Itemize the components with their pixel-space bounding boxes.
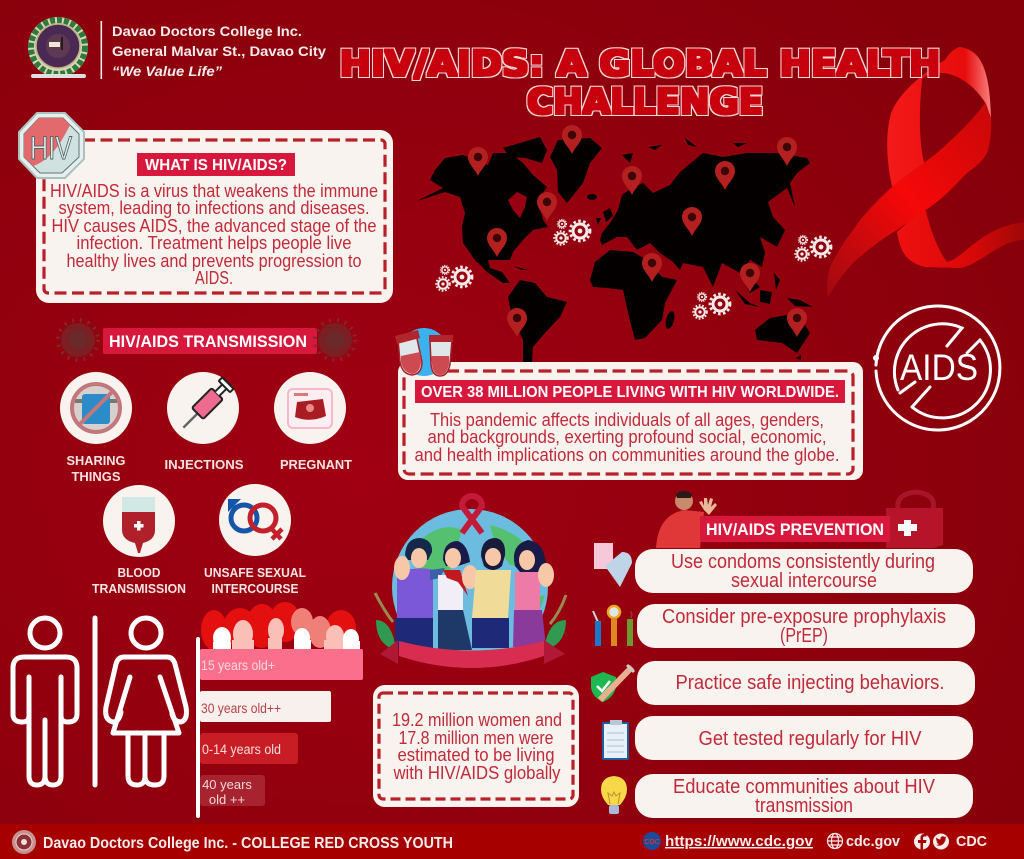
title xyxy=(340,44,940,122)
body text: HIV causes AIDS, the advanced stage of the xyxy=(52,216,376,236)
step: condoms xyxy=(635,549,973,593)
illustration: people and globe xyxy=(375,496,566,668)
heading xyxy=(415,380,845,403)
bar: 15 years old+: 15 years old+ xyxy=(201,658,275,673)
step: educate: Educate communities about HIV xyxy=(673,776,936,798)
continents xyxy=(417,137,813,362)
icon: condom packets xyxy=(594,543,632,587)
panel: what is HIV/AIDS xyxy=(36,130,393,303)
body text: and health implications on communities around the globe. xyxy=(414,445,840,465)
bar: 0-14 years old: 0-14 years old xyxy=(202,742,281,757)
item: sharing things: THINGS xyxy=(72,469,121,484)
college address: General Malvar St., Davao City xyxy=(112,43,326,59)
footer organisation name: Davao Doctors College Inc. - COLLEGE RED CROSS YOUTH xyxy=(43,835,453,852)
body text: 17.8 million men were xyxy=(398,728,554,748)
step: PrEP: Consider pre-exposure prophylaxis xyxy=(662,606,946,628)
item: sharing things xyxy=(60,372,132,484)
icon: woman xyxy=(106,618,186,785)
icon: CDC seal xyxy=(643,832,661,850)
icon: waving person xyxy=(656,491,717,548)
heading xyxy=(137,153,295,176)
heading: HIV/AIDS TRANSMISSION xyxy=(109,332,307,351)
person 4 xyxy=(513,540,554,647)
heading: OVER 38 MILLION PEOPLE LIVING WITH HIV WORLDWIDE. xyxy=(421,384,839,401)
site name: cdc.gov xyxy=(846,834,900,850)
body text xyxy=(414,410,840,465)
item: blood transmission: TRANSMISSION xyxy=(92,581,186,596)
body text: healthy lives and prevents progression to xyxy=(66,251,362,271)
source name: CDC xyxy=(956,834,988,850)
item: injections xyxy=(164,372,244,472)
item: unsafe sexual intercourse xyxy=(204,484,306,596)
panel: 38 million xyxy=(398,362,863,480)
section: transmission xyxy=(58,320,355,596)
icon: no AIDS sign xyxy=(874,306,1000,430)
icon: globe xyxy=(828,834,842,848)
location pins xyxy=(468,125,807,337)
icon: college logo xyxy=(28,17,88,78)
bar: 40 years old ++: old ++ xyxy=(209,792,245,807)
body text: infection. Treatment helps people live xyxy=(76,233,352,253)
title: CHALLENGE xyxy=(527,82,763,122)
body text: AIDS. xyxy=(195,268,233,288)
item: sharing things: SHARING xyxy=(66,453,126,468)
body text: HIV/AIDS is a virus that weakens the immune xyxy=(50,181,378,201)
body text: estimated to be living xyxy=(398,745,554,765)
step: get tested: Get tested regularly for HIV xyxy=(698,728,922,750)
header logo and college info xyxy=(28,17,326,79)
heading: HIV/AIDS PREVENTION xyxy=(706,521,884,539)
step: PrEP xyxy=(637,604,975,648)
icon: virus left xyxy=(58,320,98,360)
step: educate xyxy=(635,774,973,818)
step: get tested xyxy=(635,716,973,760)
icon: light bulb xyxy=(601,776,627,814)
bar: 0-14 years old xyxy=(200,733,298,764)
step: safe injecting xyxy=(637,661,975,705)
body text: 19.2 million women and xyxy=(392,710,562,730)
bar: 30 years old++ xyxy=(200,691,331,722)
step: condoms: Use condoms consistently during xyxy=(671,551,935,573)
item: unsafe sexual intercourse: UNSAFE SEXUAL xyxy=(204,565,306,580)
title: HIV/AIDS: A GLOBAL HEALTH xyxy=(340,44,940,84)
body text: This pandemic affects individuals of all ages, genders, xyxy=(430,410,824,430)
bar: 40 years old ++ xyxy=(200,775,265,807)
person 2 xyxy=(438,541,478,650)
banner xyxy=(380,640,565,668)
body text: and backgrounds, exerting profound social, economic, xyxy=(428,427,826,447)
item: blood transmission xyxy=(92,485,186,596)
divider xyxy=(92,618,98,785)
person 1 xyxy=(394,538,445,648)
Hudson Bay xyxy=(508,192,527,218)
footer xyxy=(0,824,1024,859)
icon: test tubes xyxy=(395,328,453,376)
body text: with HIV/AIDS globally xyxy=(393,763,560,783)
heading: WHAT IS HIV/AIDS? xyxy=(145,157,287,174)
item: pregnant: PREGNANT xyxy=(280,457,352,472)
icon: first aid kit xyxy=(886,492,943,548)
item: injections: INJECTIONS xyxy=(164,457,244,472)
icon: red ribbon xyxy=(827,47,1024,297)
icon: small ribbon xyxy=(462,496,482,533)
item: pregnant xyxy=(274,372,352,472)
icon: virus right xyxy=(315,320,355,360)
college motto: “We Value Life” xyxy=(112,63,222,79)
bar: 30 years old++: 30 years old++ xyxy=(201,701,281,716)
icon: shield and syringe xyxy=(591,665,634,702)
icon: CDC seal: CDC xyxy=(644,839,660,846)
step: PrEP: (PrEP) xyxy=(780,625,828,647)
icon: man and woman figures xyxy=(13,618,186,785)
item: blood transmission: BLOOD xyxy=(118,565,160,580)
heading xyxy=(700,516,890,542)
icon: no AIDS sign: AIDS xyxy=(900,347,978,388)
person 3 xyxy=(472,538,511,648)
panel: women and men estimate xyxy=(373,685,579,807)
college name: Davao Doctors College Inc. xyxy=(112,23,302,39)
virus clusters xyxy=(436,220,831,319)
icon: crowd silhouettes xyxy=(201,602,360,650)
section: prevention xyxy=(591,491,975,818)
step: educate: transmission xyxy=(755,795,853,817)
icon: HIV stop sign: HIV xyxy=(30,130,73,166)
world map xyxy=(417,125,831,362)
icon: twitter xyxy=(933,834,949,850)
icon: footer logo xyxy=(12,830,36,854)
icon: plus xyxy=(898,520,917,536)
icon: HIV stop sign xyxy=(19,113,84,178)
bar: 40 years old ++: 40 years xyxy=(202,777,252,792)
body text xyxy=(50,181,378,288)
website link: https://www.cdc.gov xyxy=(665,834,813,850)
icon: facebook xyxy=(914,834,930,850)
body text xyxy=(392,710,562,783)
step: safe injecting: Practice safe injecting behaviors. xyxy=(676,672,944,694)
icon: tools xyxy=(593,606,633,646)
icon: man xyxy=(13,618,77,785)
bar chart: age groups xyxy=(196,637,363,818)
icon: clipboard xyxy=(603,720,628,759)
leaves xyxy=(375,593,566,650)
globe xyxy=(392,509,548,665)
step: condoms: sexual intercourse xyxy=(731,570,877,592)
item: unsafe sexual intercourse: INTERCOURSE xyxy=(212,581,299,596)
body text: system, leading to infections and diseases. xyxy=(58,198,370,218)
bar: 15 years old+ xyxy=(200,649,363,680)
